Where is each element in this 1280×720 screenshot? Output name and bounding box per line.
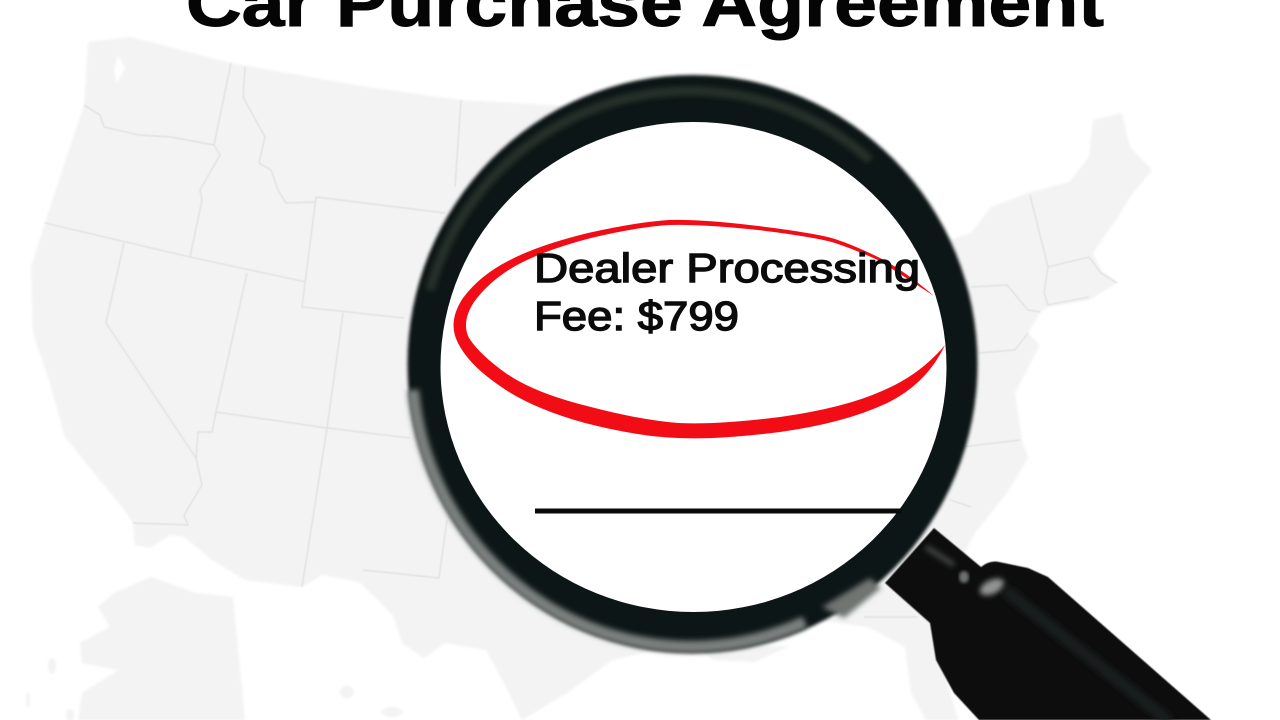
magnifying glass rim [408,75,978,653]
signature line [535,508,902,514]
lens contents [454,220,945,514]
fee text: second line: Fee: $799 [534,293,739,339]
red circled highlight [454,220,945,438]
magnifying glass handle [885,528,1211,720]
fee text: first line: Dealer Processing [534,245,920,291]
